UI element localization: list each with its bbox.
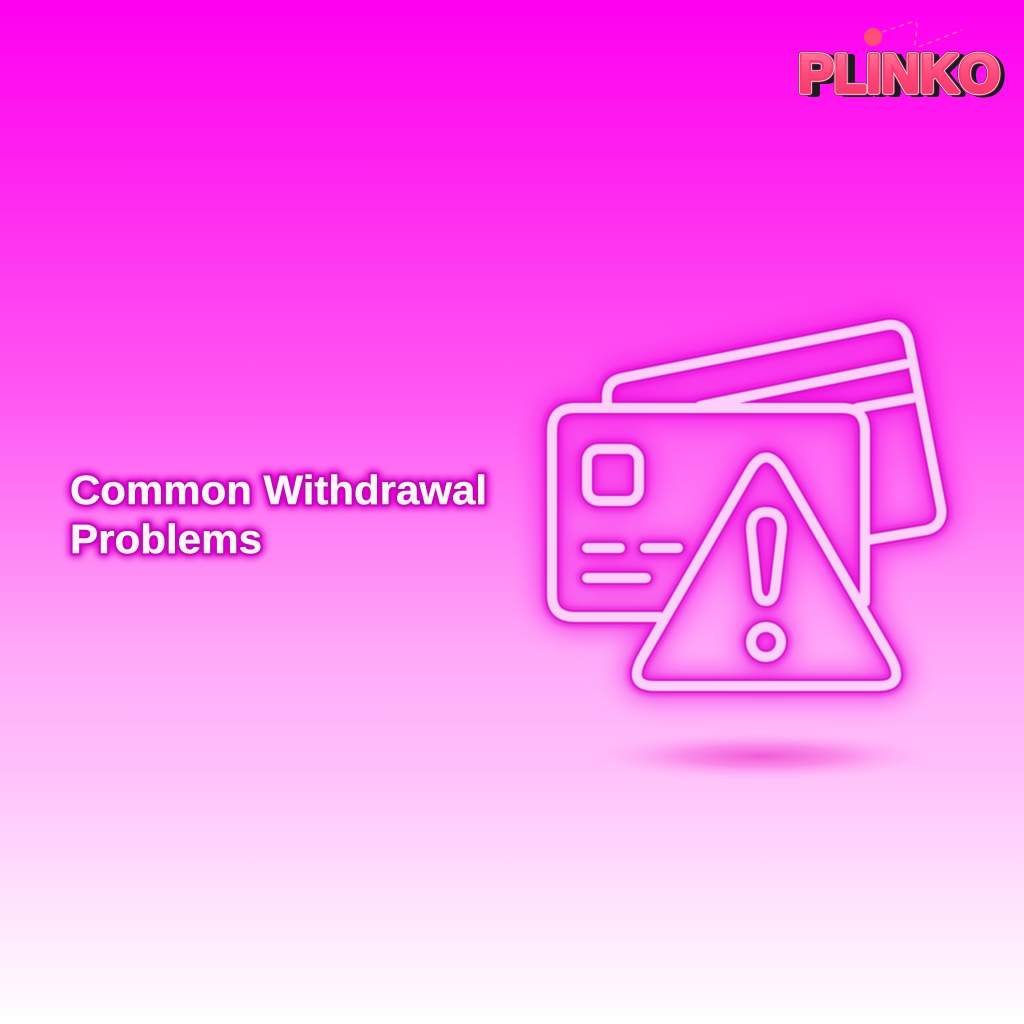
- heading outline: Problems: [70, 516, 262, 562]
- heading outline: [70, 467, 487, 562]
- logo ball with dashed trail: [864, 22, 962, 47]
- heading glow: Common Withdrawal: [70, 467, 487, 513]
- heading outline: Common Withdrawal: [70, 467, 487, 513]
- logo wordmark: PLINKO: [798, 44, 1000, 104]
- heading text: Problems: [70, 516, 262, 562]
- icon: credit cards with warning triangle: [552, 325, 941, 686]
- logo wordmark: PLINKO: [798, 44, 1000, 104]
- heading glow: Problems: [70, 516, 262, 562]
- heading: [70, 467, 487, 562]
- wedge on card stripe: [693, 388, 790, 406]
- logo: Plinko: [798, 22, 1004, 106]
- logo wordmark: PLINKO: [806, 46, 1004, 106]
- icon ground shadow: [592, 732, 932, 780]
- logo wordmark: PLINKO: [798, 43, 1000, 103]
- logo wordmark: PLINKO: [798, 44, 1000, 104]
- heading text: [70, 467, 487, 562]
- heading glow: [70, 467, 487, 562]
- heading text: Common Withdrawal: [70, 467, 487, 513]
